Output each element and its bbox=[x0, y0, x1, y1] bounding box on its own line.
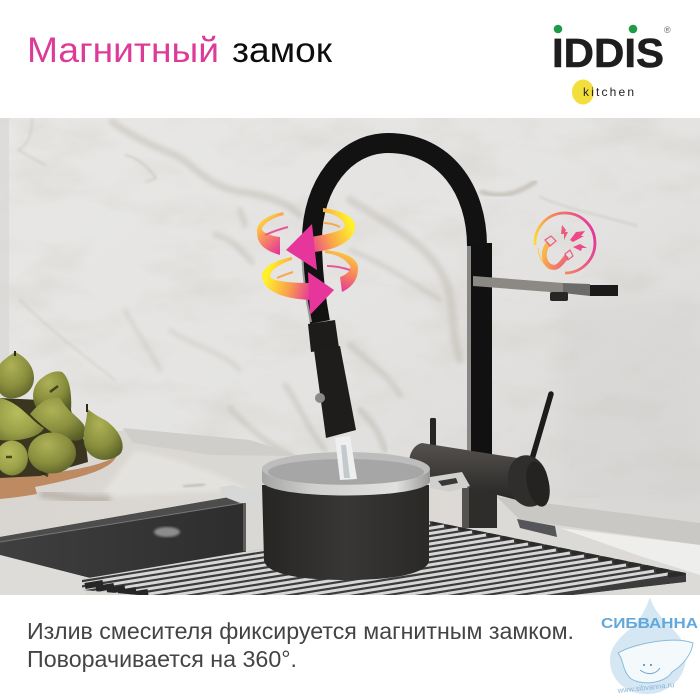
sink bbox=[0, 498, 246, 578]
body text bbox=[27, 618, 574, 672]
body text: Поворачивается на 360°. bbox=[27, 646, 297, 672]
body text: Излив смесителя фиксируется магнитным замком. bbox=[27, 618, 574, 644]
watermark: Sibvanna bbox=[601, 597, 699, 695]
logo: IDDIS kitchen: IDDIS bbox=[552, 30, 664, 76]
faucet mixer body and levers bbox=[409, 394, 554, 511]
faucet pull-out spray head bbox=[308, 320, 356, 438]
upper rotation arrow bbox=[257, 208, 355, 270]
title bbox=[27, 30, 332, 70]
logo: IDDIS kitchen: kitchen bbox=[583, 85, 634, 99]
title: Магнитный bbox=[27, 30, 219, 70]
saucepan bbox=[220, 452, 470, 580]
faucet column and gooseneck bbox=[302, 143, 497, 528]
lower rotation arrow bbox=[262, 250, 358, 315]
logo: IDDIS kitchen bbox=[552, 25, 671, 105]
photo: kitchen scene bbox=[0, 118, 700, 641]
icon: rotation arrows bbox=[257, 208, 358, 315]
watermark: Sibvanna: www.sibvanna.ru bbox=[616, 680, 675, 695]
drying rack bbox=[82, 521, 686, 595]
fruit bowl with pears bbox=[0, 351, 123, 499]
filtered water spout bbox=[473, 276, 618, 301]
title: замок bbox=[232, 30, 332, 70]
icon: magnet in ring bbox=[535, 213, 595, 273]
marble countertop bbox=[0, 428, 700, 595]
marble wall bbox=[0, 118, 700, 523]
logo: IDDIS kitchen: ® bbox=[664, 25, 671, 35]
watermark: Sibvanna: СИБВАННА bbox=[601, 616, 699, 632]
water stream bbox=[335, 436, 357, 480]
pears bbox=[0, 351, 123, 476]
